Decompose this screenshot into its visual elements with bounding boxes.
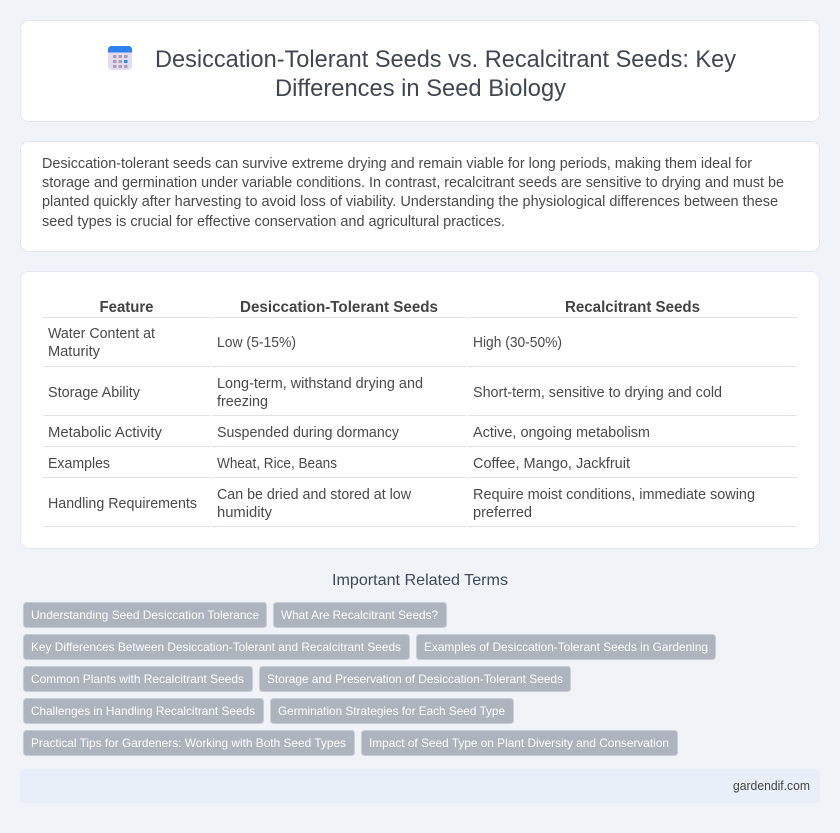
tags: related terms: Understanding Seed Desiccation Tolerance bbox=[31, 608, 259, 622]
title: Desiccation-Tolerant Seeds vs. Recalcitrant Seeds: Key bbox=[155, 46, 736, 73]
table row: water content: Water Content at bbox=[48, 326, 155, 342]
table row: storage ability: freezing bbox=[217, 394, 268, 410]
title: Differences in Seed Biology bbox=[275, 75, 566, 102]
table row: water content: Low (5-15%) bbox=[217, 335, 296, 351]
table row: examples: Coffee, Mango, Jackfruit bbox=[473, 456, 630, 472]
table row: handling requirements: Handling Requirements bbox=[48, 496, 197, 512]
tags: related terms: Impact of Seed Type on Plant Diversity and Conservation bbox=[369, 736, 669, 750]
panel: title card bbox=[20, 20, 820, 122]
tags: related terms: What Are Recalcitrant Seeds? bbox=[281, 608, 438, 622]
tags: related terms: Examples of Desiccation-Tolerant Seeds in Gardening bbox=[424, 640, 708, 654]
table row: handling requirements: humidity bbox=[217, 505, 273, 521]
table row: metabolic activity: Metabolic Activity bbox=[48, 425, 163, 441]
table row: examples: Examples bbox=[48, 456, 110, 472]
table row: examples: Wheat, Rice, Beans bbox=[217, 456, 337, 472]
heading: related terms: Important Related Terms bbox=[332, 572, 508, 589]
table row: handling requirements: Can be dried and stored at low bbox=[217, 487, 412, 503]
footer bbox=[20, 769, 820, 803]
table header: Recalcitrant Seeds bbox=[565, 299, 700, 316]
text block: intro paragraph bbox=[42, 156, 784, 230]
tags: related terms bbox=[24, 602, 716, 756]
table row: water content: High (30-50%) bbox=[473, 335, 562, 351]
table header bbox=[100, 299, 700, 316]
table row: storage ability: Short-term, sensitive to drying and cold bbox=[473, 385, 722, 401]
panel: comparison table bbox=[20, 272, 820, 548]
footer: gardendif.com bbox=[733, 778, 810, 793]
table row: handling requirements: Require moist conditions, immediate sowing bbox=[473, 487, 755, 503]
tags: related terms: Germination Strategies for Each Seed Type bbox=[278, 704, 505, 718]
text block: intro paragraph: storage and germination under variable conditions. In contrast, recalcitrant seeds are sensitive to drying and must be bbox=[42, 175, 784, 191]
tags: related terms: Key Differences Between Desiccation-Tolerant and Recalcitrant Seeds bbox=[31, 640, 401, 654]
table row: storage ability: Storage Ability bbox=[48, 385, 141, 401]
table row: storage ability bbox=[48, 376, 722, 410]
table row: metabolic activity: Active, ongoing metabolism bbox=[473, 425, 650, 441]
tags: related terms: Practical Tips for Gardeners: Working with Both Seed Types bbox=[31, 736, 346, 750]
panel: introduction bbox=[20, 142, 820, 252]
title bbox=[155, 46, 736, 102]
table row: metabolic activity bbox=[48, 425, 650, 441]
tags: related terms: Challenges in Handling Recalcitrant Seeds bbox=[31, 704, 255, 718]
tags: related terms: Common Plants with Recalcitrant Seeds bbox=[31, 672, 244, 686]
table header: Desiccation-Tolerant Seeds bbox=[240, 299, 438, 316]
icon: calendar bbox=[108, 46, 132, 70]
tags: related terms: Storage and Preservation of Desiccation-Tolerant Seeds bbox=[267, 672, 563, 686]
table row: examples bbox=[48, 456, 630, 472]
table row: handling requirements bbox=[48, 487, 755, 521]
text block: intro paragraph: seed types is crucial for effective conservation and agricultural practices. bbox=[42, 214, 505, 230]
table row: water content: Maturity bbox=[48, 344, 101, 360]
table row: handling requirements: preferred bbox=[473, 505, 532, 521]
table row: metabolic activity: Suspended during dormancy bbox=[217, 425, 400, 441]
text block: intro paragraph: planted quickly after harvesting to avoid loss of viability. Understanding the physiological differences between these bbox=[42, 194, 778, 210]
table header: Feature bbox=[100, 299, 154, 316]
table row: storage ability: Long-term, withstand drying and bbox=[217, 376, 423, 392]
text block: intro paragraph: Desiccation-tolerant seeds can survive extreme drying and remain viable for long periods, making them ideal for bbox=[42, 156, 752, 172]
table row: water content bbox=[48, 326, 562, 360]
